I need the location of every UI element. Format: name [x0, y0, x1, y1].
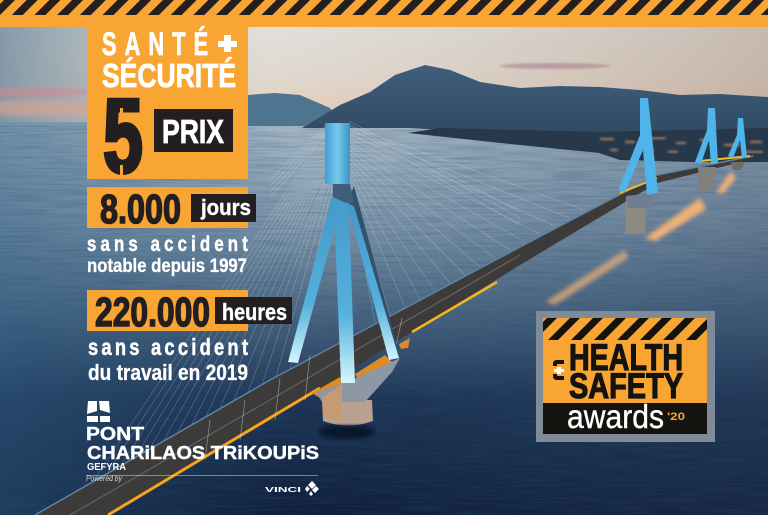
stat: 8.000 jours	[87, 186, 256, 232]
heading: santé: SANTÉ	[102, 26, 208, 62]
logo word: pont: PONT	[86, 424, 144, 444]
bridge: stay cables	[94, 121, 585, 480]
town lights on the far shore	[600, 138, 763, 152]
logo word: charilaos trikoupis: CHARiLAOS TRiKOUPiS	[87, 443, 319, 463]
jours label: jours	[200, 195, 251, 220]
vinci logo	[265, 481, 319, 496]
badge word: awards: awards	[567, 398, 664, 435]
panel: santé sécurité 5 prix	[87, 26, 248, 195]
icon: plus sign	[218, 35, 237, 52]
logo word: gefyra: GEFYRA	[87, 462, 126, 473]
powered by: Powered by	[86, 474, 123, 483]
heures label: heures	[222, 299, 287, 325]
badge: health and safety awards	[536, 311, 715, 442]
bridge: far pylons	[618, 98, 747, 234]
caption: sans accident du travail en 2019: sans accident	[88, 335, 248, 361]
prix label: PRIX	[162, 113, 224, 150]
caption: sans accident notable depuis 1997	[87, 233, 248, 277]
badge hazard stripes	[543, 318, 707, 340]
caption: sans accident du travail en 2019	[88, 335, 248, 385]
icon: c plus mark	[553, 360, 564, 380]
bridge: main pylon and pier	[288, 123, 410, 439]
caption: sans accident du travail en 2019: du travail en 2019	[88, 360, 248, 385]
bridge: road deck	[35, 156, 753, 515]
bridge: light reflections on water	[545, 171, 736, 305]
logo: pont charilaos trikoupis	[86, 401, 319, 496]
badge word: health: HEALTH	[569, 337, 683, 378]
caption: sans accident notable depuis 1997: notable depuis 1997	[87, 256, 247, 277]
big number 5	[103, 78, 143, 195]
number 220.000: 220.000	[95, 289, 210, 335]
number 8.000: 8.000	[100, 186, 181, 232]
badge year: '20	[667, 411, 685, 423]
badge word: safety: SAFETY	[569, 367, 683, 406]
caption: sans accident notable depuis 1997: sans accident	[87, 233, 248, 257]
top hazard stripe band	[0, 0, 768, 27]
heading: sécurité: SÉCURITÉ	[102, 57, 236, 94]
vinci logo: VINCI	[265, 487, 301, 494]
big number 5: 5	[103, 78, 143, 195]
stat: 220.000 heures	[87, 289, 292, 335]
icon: bridge emblem	[87, 401, 110, 422]
